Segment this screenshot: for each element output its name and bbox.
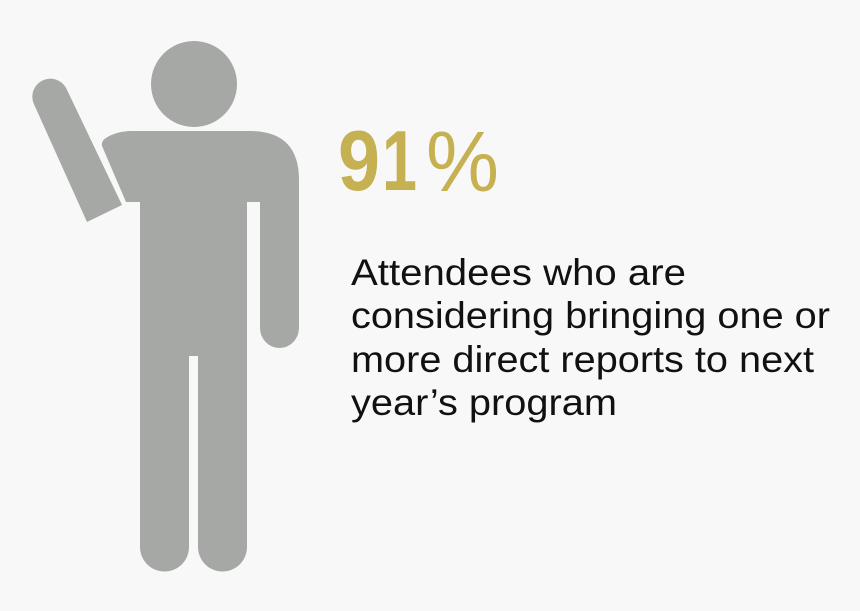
text block: description: year’s program [351,382,617,423]
text block: description: considering bringing one or [351,295,830,336]
statistic: 91%: 9 [338,114,380,209]
statistic: 91% [338,114,499,210]
text block: description: Attendees who are [351,252,686,293]
text block: description: more direct reports to next [351,339,815,380]
icon: person with raised arm [32,41,299,572]
statistic: 91%: 1 [382,114,417,209]
statistic: 91%: % [426,115,499,210]
text block: description [351,252,830,423]
